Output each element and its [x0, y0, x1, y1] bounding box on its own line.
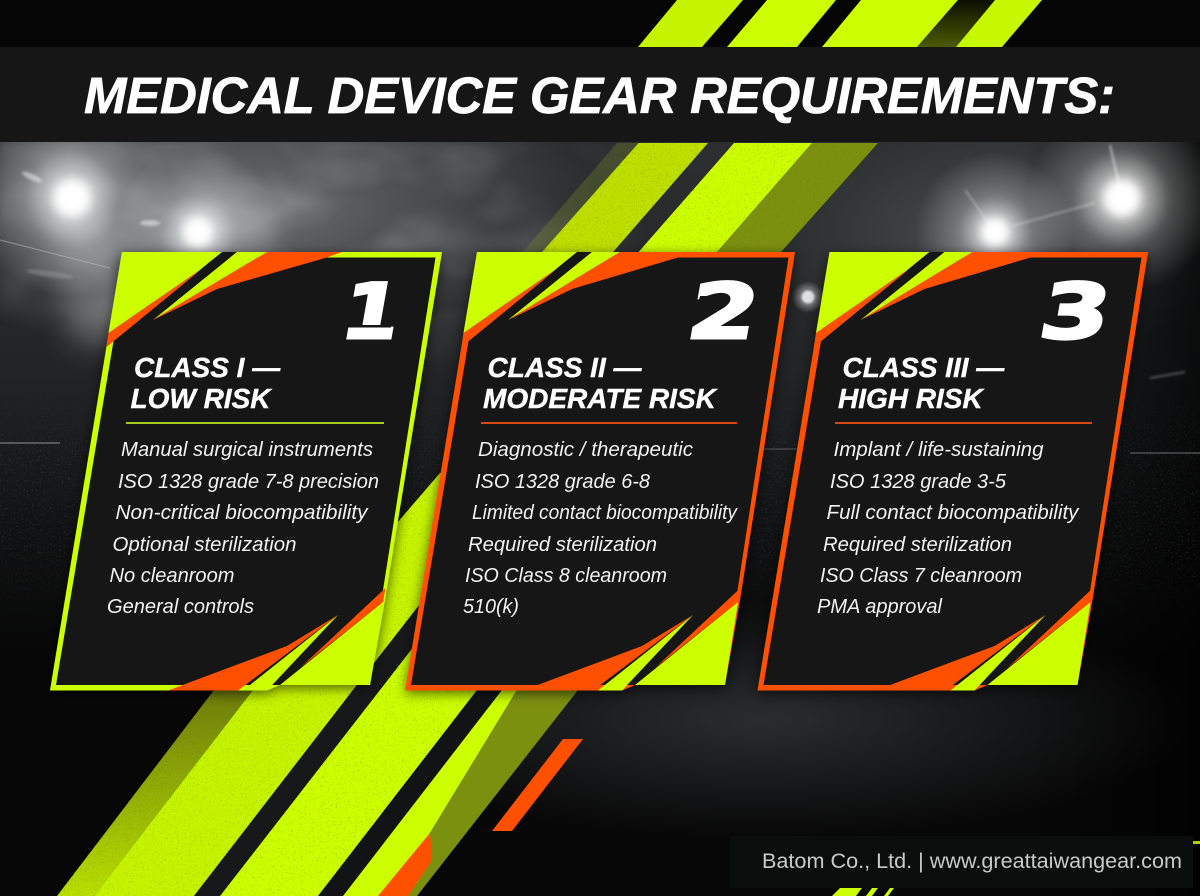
top lime stripes above the title band: [638, 0, 1042, 47]
card 2 requirement list: ISO 1328 grade 6-8: [475, 471, 650, 493]
panel: class III card: [758, 252, 1148, 690]
orange accent dash: [492, 739, 583, 831]
card 2 heading: [483, 352, 718, 414]
card 2 heading: MODERATE RISK: [483, 383, 718, 414]
orange wedge on stripe: [378, 833, 432, 896]
card 2 requirement list: Diagnostic / therapeutic: [478, 439, 693, 461]
card 3 frame and corner accents: [758, 252, 1148, 690]
title band: [0, 47, 1200, 142]
card 1 heading: CLASS I —: [134, 352, 281, 383]
card 2 requirement list: ISO Class 8 cleanroom: [465, 565, 667, 587]
panel: class II card: [405, 252, 795, 690]
card 3 heading: CLASS III —: [842, 352, 1005, 383]
card 2 requirement list: [463, 439, 738, 618]
footer credit: [730, 836, 1200, 896]
card 1 requirement list: Manual surgical instruments: [121, 439, 373, 461]
card 2 requirement list: Limited contact biocompatibility: [472, 502, 738, 524]
card 1 number: 1: [335, 267, 408, 356]
card 3 requirement list: [817, 439, 1080, 618]
card 1 requirement list: ISO 1328 grade 7-8 precision: [118, 471, 379, 493]
card 1 requirement list: No cleanroom: [110, 565, 234, 587]
card 1 requirement list: Non-critical biocompatibility: [116, 502, 369, 524]
card 1 heading: [130, 352, 281, 414]
background: stadium scene: [0, 142, 1200, 822]
card 3 requirement list: Implant / life-sustaining: [834, 439, 1044, 461]
card 2 requirement list: Required sterilization: [468, 534, 657, 556]
spotlights: right pair and flare: [792, 103, 1200, 378]
footer credit: Batom Co., Ltd. | www.greattaiwangear.com: [762, 850, 1182, 873]
panel: class I card: [50, 252, 442, 690]
card 3 number: 3: [1033, 268, 1118, 356]
card 1 requirement list: Optional sterilization: [112, 534, 296, 556]
card 3 requirement list: Full contact biocompatibility: [826, 502, 1080, 524]
card 1 frame and corner accents: [50, 252, 442, 690]
card 3 requirement list: Required sterilization: [823, 534, 1012, 556]
title: MEDICAL DEVICE GEAR REQUIREMENTS:: [84, 67, 1115, 124]
card 1 requirement list: General controls: [107, 596, 254, 618]
card 3 requirement list: PMA approval: [817, 596, 943, 618]
card 2 number: 2: [681, 268, 766, 356]
lower diagonal stripes: [57, 473, 578, 896]
card 3 heading: [838, 352, 1005, 414]
card 2 frame and corner accents: [405, 252, 795, 690]
stripe speckle texture: [58, 143, 876, 896]
card 3 requirement list: ISO 1328 grade 3-5: [830, 471, 1007, 493]
card 1 requirement list: [107, 439, 379, 618]
card 2 requirement list: 510(k): [463, 596, 519, 618]
card 3 heading: HIGH RISK: [838, 383, 984, 414]
card 1 heading: LOW RISK: [130, 383, 272, 414]
upper diagonal stripes between title and cards: [522, 143, 878, 252]
spotlights: left pair: [0, 98, 283, 345]
card 2 heading: CLASS II —: [488, 352, 643, 383]
card 3 requirement list: ISO Class 7 cleanroom: [820, 565, 1022, 587]
